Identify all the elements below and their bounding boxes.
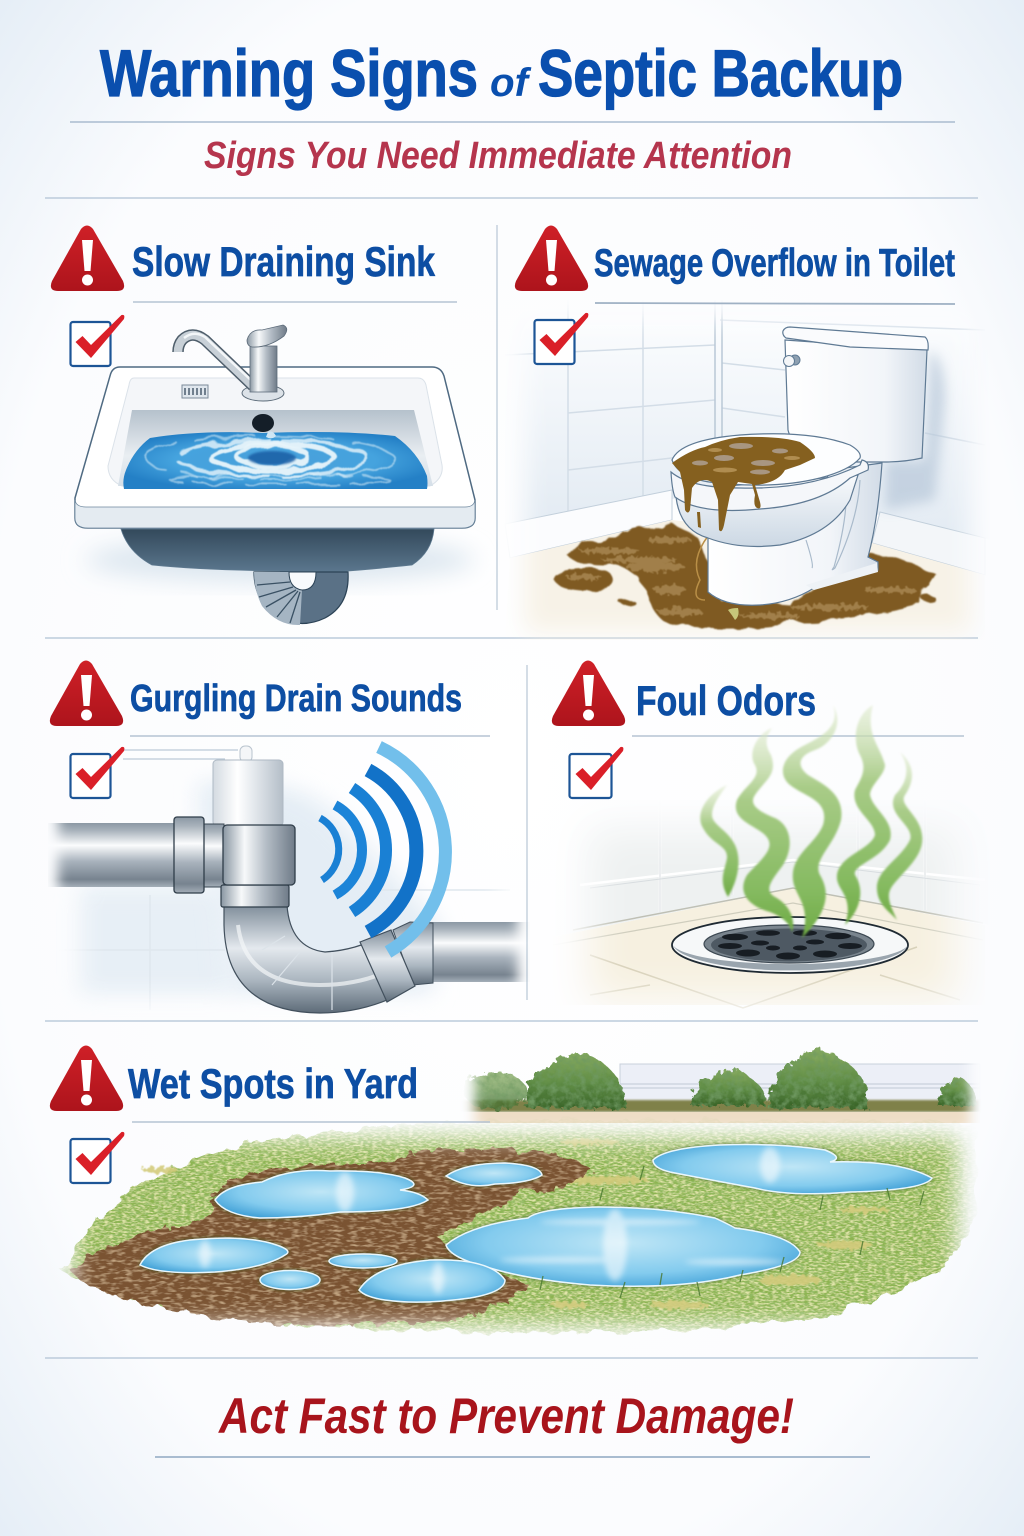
left pipe <box>48 823 178 887</box>
grass tufts <box>540 1166 924 1298</box>
toilet pedestal <box>708 463 882 605</box>
icon: warning triangle odors <box>552 660 625 726</box>
title: of <box>490 61 532 105</box>
title: Septic Backup <box>538 36 903 110</box>
icon: warning triangle toilet <box>515 226 588 291</box>
toilet seat lid <box>672 434 860 485</box>
panel: sewage overflow in toilet <box>505 226 990 640</box>
icon: warning triangle sink <box>51 226 124 291</box>
icon: warning triangle yard <box>50 1046 123 1111</box>
sewage puddle <box>554 523 936 629</box>
icon: green odor wisps <box>700 705 922 938</box>
heading: foul odors: Foul Odors <box>636 677 816 724</box>
toilet tank <box>785 340 927 462</box>
sewage on seat with drips <box>672 437 815 531</box>
illustration: toilet <box>505 300 990 640</box>
icon: checkbox yard <box>70 1132 124 1183</box>
icon: warning triangle gurgling <box>50 660 123 726</box>
water sheen <box>199 1147 785 1294</box>
title: Warning Signs <box>100 36 478 110</box>
heading: slow draining sink: Slow Draining Sink <box>132 238 436 285</box>
icon: sound waves <box>320 747 445 952</box>
elbow bend <box>224 905 413 1013</box>
top stem <box>240 746 252 762</box>
heading: wet spots in yard: Wet Spots in Yard <box>128 1060 418 1107</box>
couplings <box>204 824 224 887</box>
illustration: pipe <box>48 746 530 1013</box>
icon: checkbox toilet <box>534 313 588 364</box>
illustration: floor drain <box>550 705 990 1008</box>
puddles <box>140 1145 932 1302</box>
title <box>100 36 903 110</box>
illustration: sink <box>75 325 475 625</box>
icon: checkbox gurgling <box>70 747 124 798</box>
panel: foul odors <box>550 660 990 1008</box>
heading: gurgling drain sounds: Gurgling Drain Sounds <box>130 678 462 720</box>
subtitle: Signs You Need Immediate Attention <box>204 135 792 177</box>
illustration: yard <box>60 1050 980 1333</box>
panel: slow draining sink <box>51 226 475 625</box>
wall tiles and floor <box>568 815 978 1008</box>
panel: gurgling drain sounds <box>48 660 530 1013</box>
toilet bowl <box>676 475 858 546</box>
closing call to action: Act Fast to Prevent Damage! <box>217 1388 794 1444</box>
icon: checkbox odors <box>570 747 623 798</box>
panel: wet spots in yard <box>50 1046 980 1333</box>
fence, soil strip and bushes <box>460 1050 980 1123</box>
bathroom walls and floor <box>505 300 990 640</box>
lawn <box>60 1120 977 1333</box>
right pipe <box>425 922 530 982</box>
grate slots <box>718 930 862 960</box>
icon: checkbox sink <box>70 315 124 366</box>
wall shading <box>50 775 510 1010</box>
